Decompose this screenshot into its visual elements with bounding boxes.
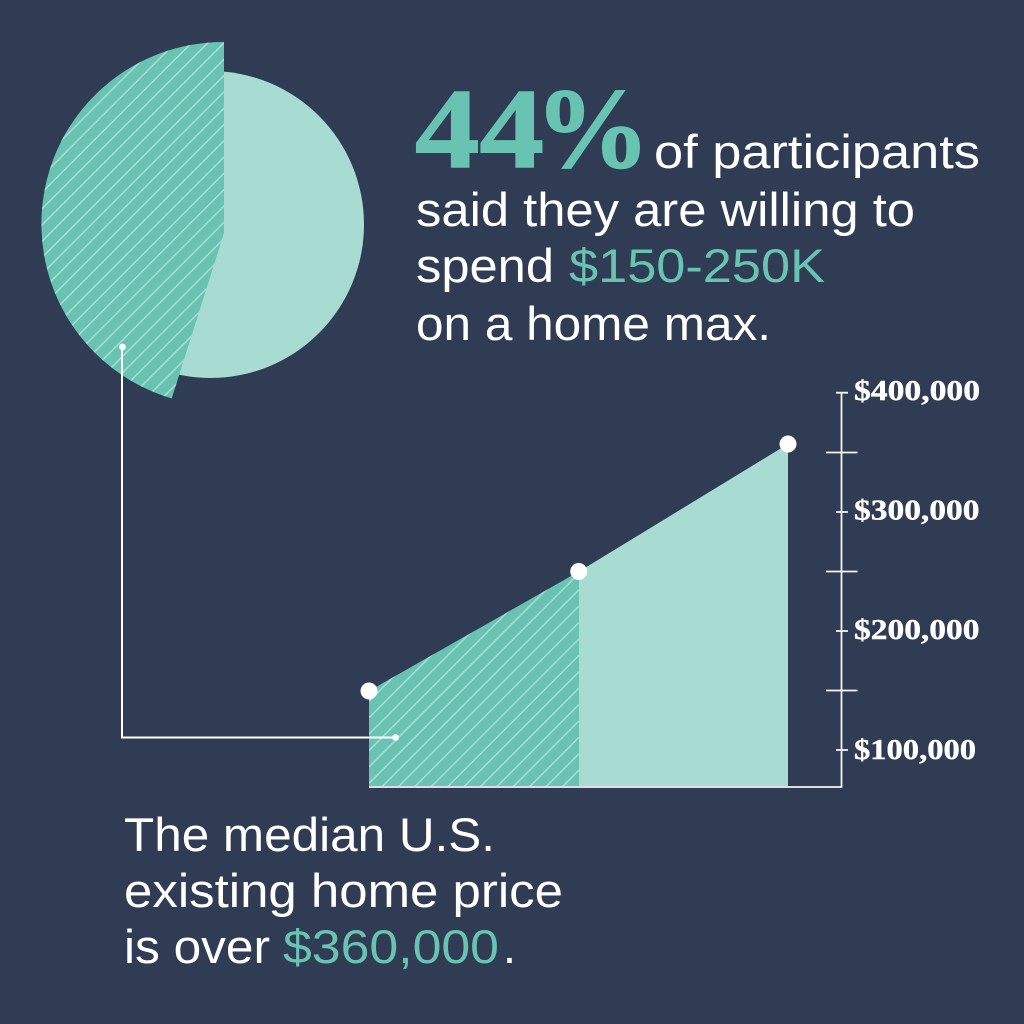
caption: median home price bbox=[124, 808, 563, 973]
big number 44% bbox=[415, 65, 650, 192]
line: is over $360,000.: . bbox=[503, 920, 516, 973]
line: on a home max.: on a home max. bbox=[416, 297, 771, 350]
line: spend $150-250K bbox=[416, 239, 825, 292]
data point: low bbox=[360, 682, 378, 700]
area: light segment bbox=[579, 444, 788, 786]
pie chart bbox=[41, 42, 364, 398]
headline text: 44% of participants bbox=[415, 65, 980, 350]
line: of participants: of participants bbox=[654, 125, 980, 178]
area: hatched segment bbox=[369, 576, 579, 786]
line: The median U.S.: The median U.S. bbox=[124, 808, 495, 861]
axis label 100k: $100,000 bbox=[854, 735, 976, 766]
big number 44%: 44 bbox=[415, 65, 544, 192]
data point: mid bbox=[570, 563, 587, 580]
line: said they are willing to: said they are willing to bbox=[416, 183, 915, 236]
line: spend $150-250K: $150-250K bbox=[569, 239, 825, 292]
line: existing home price: existing home price bbox=[124, 864, 563, 917]
leader line connecting pie to chart bbox=[119, 344, 399, 741]
data point: high bbox=[780, 436, 796, 452]
axis lines and ticks bbox=[369, 393, 858, 787]
area chart bbox=[360, 379, 979, 788]
line: spend $150-250K: spend bbox=[416, 239, 554, 292]
axis label 400k: $400,000 bbox=[854, 376, 980, 407]
pie: 44% hatched wedge bbox=[41, 42, 224, 398]
line: is over $360,000.: is over bbox=[124, 920, 270, 973]
axis label 300k: $300,000 bbox=[854, 496, 980, 526]
line: is over $360,000. bbox=[124, 920, 516, 973]
pie: remaining share bbox=[57, 71, 364, 378]
big number 44%: % bbox=[535, 65, 650, 192]
line: is over $360,000.: $360,000 bbox=[283, 920, 499, 973]
axis label 200k: $200,000 bbox=[854, 615, 980, 646]
